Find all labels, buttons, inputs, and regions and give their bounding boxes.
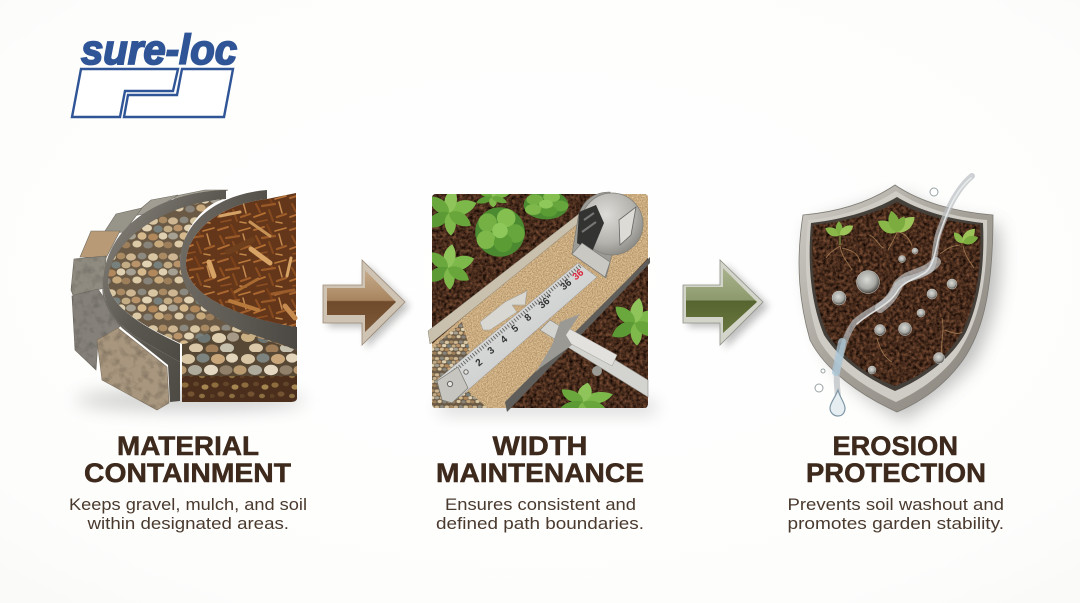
description (436, 495, 644, 533)
tape measure body (572, 192, 643, 278)
illustration: shield of soil with water (799, 176, 1000, 420)
upper caliper jaw (480, 290, 527, 330)
shield frame (799, 185, 993, 412)
description: within designated areas. (86, 514, 289, 533)
illustration: gravel and mulch in curved edging (71, 190, 305, 410)
soil (808, 200, 984, 388)
tape numbers: 8 (523, 312, 534, 324)
description: Prevents soil washout and (788, 495, 1004, 514)
gravel bed (108, 199, 297, 378)
logo: sure-loc: sure-loc (81, 26, 237, 73)
arrow: green (683, 260, 769, 349)
heading: CONTAINMENT (84, 458, 292, 488)
panel: width maintenance (423, 185, 665, 533)
mulch (186, 193, 296, 327)
water drops (815, 188, 957, 416)
tape numbers: 36 (559, 277, 575, 293)
water stream (836, 176, 972, 398)
gravel area (432, 322, 490, 410)
tape numbers: 5 (510, 323, 521, 335)
lower caliper (536, 314, 648, 397)
tape numbers: 3 (486, 345, 497, 357)
sprouts (824, 210, 979, 246)
plants (432, 194, 476, 236)
arrow: brown (323, 260, 410, 349)
description: Keeps gravel, mulch, and soil (69, 495, 307, 514)
heading (806, 431, 986, 488)
description: defined path boundaries. (436, 514, 644, 533)
panel: material containment (69, 190, 307, 533)
heading (84, 431, 292, 488)
logo: sure-loc (72, 26, 237, 117)
tape blade (437, 263, 597, 403)
edging strips (428, 213, 580, 344)
heading: MAINTENANCE (436, 458, 644, 488)
illustration: tape measure and caliper on garden path (423, 185, 665, 420)
inner metal band (180, 190, 297, 350)
heading: WIDTH (492, 431, 588, 461)
heading: MATERIAL (117, 431, 259, 461)
infographic canvas (70, 32, 1009, 532)
tape numbers: 4 (499, 334, 510, 346)
tape numbers (474, 267, 587, 369)
description: promotes garden stability. (788, 514, 1004, 533)
heading: PROTECTION (806, 458, 986, 488)
sand path (432, 194, 648, 410)
tape numbers: 36 (571, 267, 587, 283)
lower right soil (644, 403, 648, 408)
panel: erosion protection (788, 176, 1004, 533)
stones (71, 190, 228, 370)
heading: EROSION (832, 431, 958, 461)
description: Ensures consistent and (445, 495, 636, 514)
roots (826, 232, 974, 362)
soil layer with small gravel (182, 376, 297, 402)
outer metal band (102, 190, 226, 402)
front stone (97, 328, 169, 410)
description (788, 495, 1004, 533)
heading (436, 431, 644, 488)
description (69, 495, 307, 533)
tape numbers: 36" (537, 293, 556, 311)
tape numbers: 2 (474, 357, 485, 369)
